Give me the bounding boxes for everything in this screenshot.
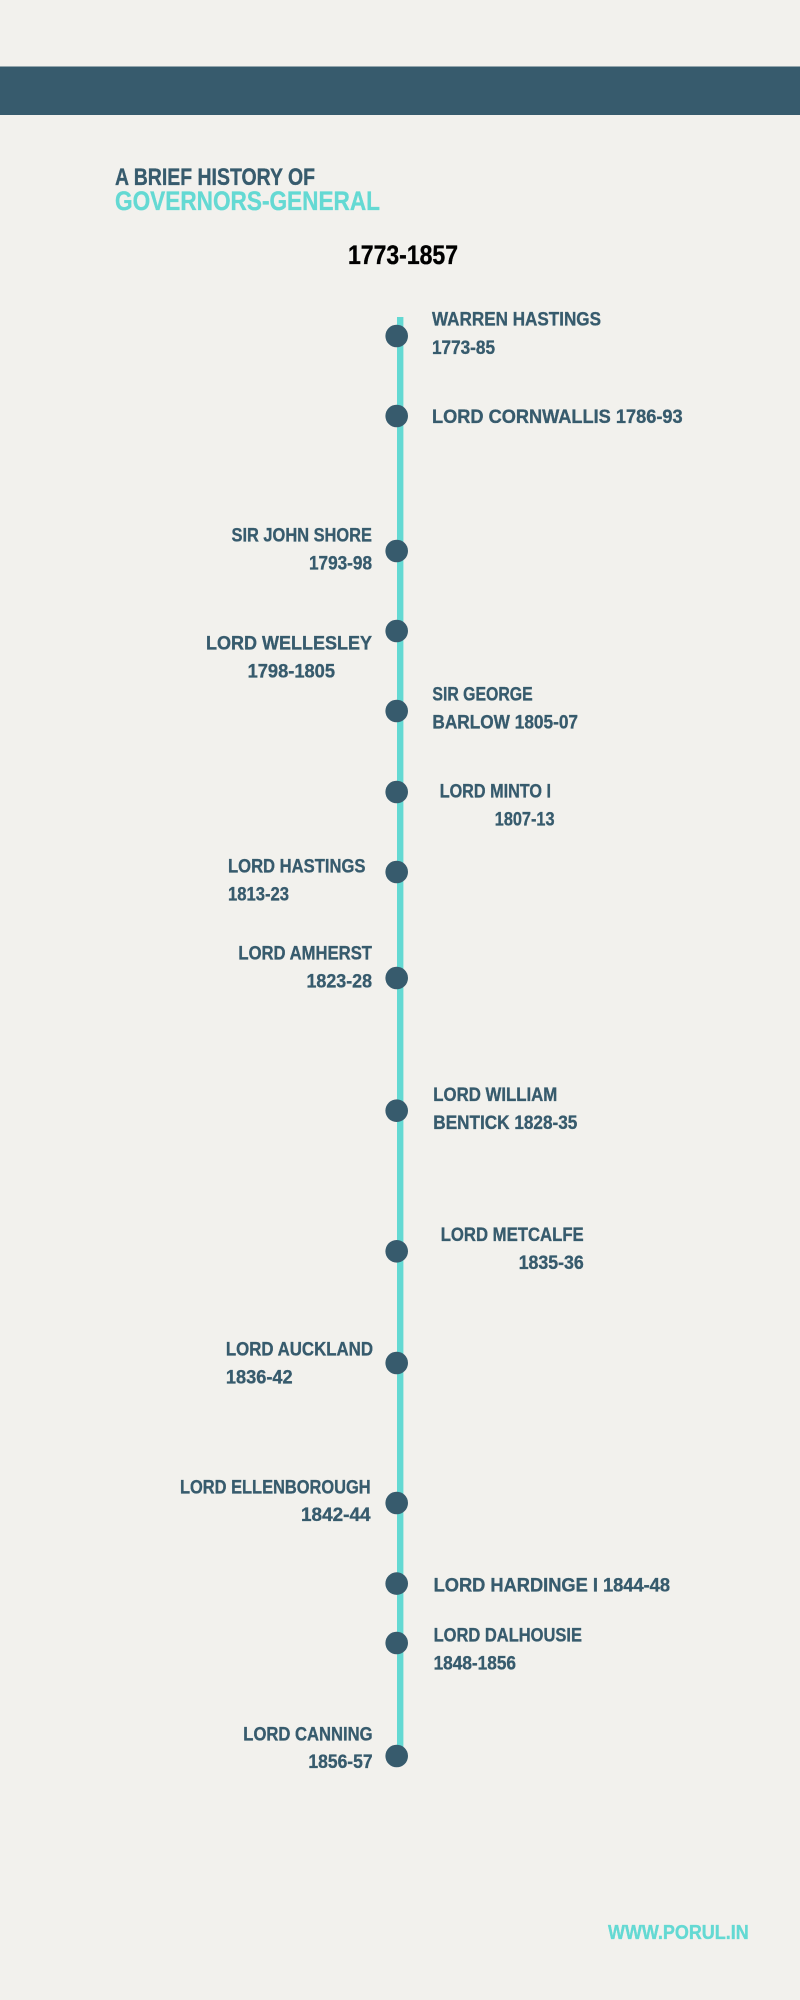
- entry: Lord Auckland: [226, 1338, 373, 1389]
- timeline nodes: [385, 325, 408, 1767]
- title: A BRIEF HISTORY OF: [115, 164, 315, 191]
- entry: Lord Hastings: LORD HASTINGS: [228, 855, 366, 877]
- entry: Lord Hastings: 1813-23: [228, 883, 289, 905]
- entry: Sir John Shore: [232, 525, 372, 575]
- entry: Lord Auckland: 1836-42: [226, 1367, 293, 1389]
- entry: Lord Amherst: LORD AMHERST: [238, 943, 372, 965]
- entry: Lord Dalhousie: 1848-1856: [434, 1652, 516, 1674]
- entry: Lord Canning: LORD CANNING: [243, 1724, 373, 1746]
- footer website: WWW.PORUL.IN: [608, 1922, 749, 1944]
- entry: Lord Metcalfe: 1835-36: [519, 1252, 584, 1274]
- entry: Lord Cornwallis: LORD CORNWALLIS 1786-93: [432, 406, 683, 428]
- entry: Sir George Barlow: SIR GEORGE: [432, 684, 533, 706]
- title: GOVERNORS-GENERAL: [115, 186, 380, 216]
- entry: Sir George Barlow: BARLOW 1805-07: [432, 712, 578, 734]
- header band: [0, 66, 800, 115]
- entry: Lord Wellesley: [206, 633, 372, 683]
- entry: Lord Metcalfe: [441, 1224, 584, 1274]
- entry: Warren Hastings: WARREN HASTINGS: [432, 309, 601, 331]
- entry: Lord Minto I: [440, 781, 555, 831]
- entry: Sir John Shore: SIR JOHN SHORE: [232, 525, 372, 547]
- entry: Sir George Barlow: [432, 684, 578, 734]
- entry: Lord Canning: 1856-57: [308, 1751, 373, 1773]
- entry: Lord Metcalfe: LORD METCALFE: [441, 1224, 584, 1246]
- entry: Lord Amherst: 1823-28: [306, 971, 372, 993]
- entry: Warren Hastings: 1773-85: [432, 337, 495, 359]
- timeline axis: [397, 317, 403, 1757]
- entry: Lord Auckland: LORD AUCKLAND: [226, 1338, 373, 1360]
- entry: Lord Dalhousie: [434, 1625, 582, 1674]
- entry: Lord Ellenborough: 1842-44: [301, 1504, 371, 1526]
- entry: Lord Canning: [243, 1724, 373, 1773]
- date range heading: 1773-1857: [348, 240, 458, 270]
- entry: Lord William Bentick: [433, 1084, 577, 1134]
- entry: Lord Ellenborough: [180, 1476, 371, 1526]
- entry: Lord Minto I: LORD MINTO I: [440, 781, 551, 803]
- entry: Lord Dalhousie: LORD DALHOUSIE: [434, 1625, 582, 1647]
- entry: Warren Hastings: [432, 309, 601, 359]
- entry: Lord Wellesley: 1798-1805: [248, 661, 335, 683]
- timeline: [180, 309, 683, 1773]
- entry: Lord Minto I: 1807-13: [495, 809, 555, 831]
- title: [115, 164, 380, 216]
- entry: Lord Amherst: [238, 943, 372, 993]
- entry: Lord William Bentick: LORD WILLIAM: [433, 1084, 557, 1106]
- entry: Lord William Bentick: BENTICK 1828-35: [433, 1112, 577, 1134]
- entry: Lord Ellenborough: LORD ELLENBOROUGH: [180, 1476, 371, 1498]
- entry: Sir John Shore: 1793-98: [309, 553, 372, 575]
- entry: Lord Wellesley: LORD WELLESLEY: [206, 633, 372, 655]
- entry: Lord Hardinge I: LORD HARDINGE I 1844-48: [434, 1574, 670, 1596]
- entry: Lord Hastings: [228, 855, 366, 905]
